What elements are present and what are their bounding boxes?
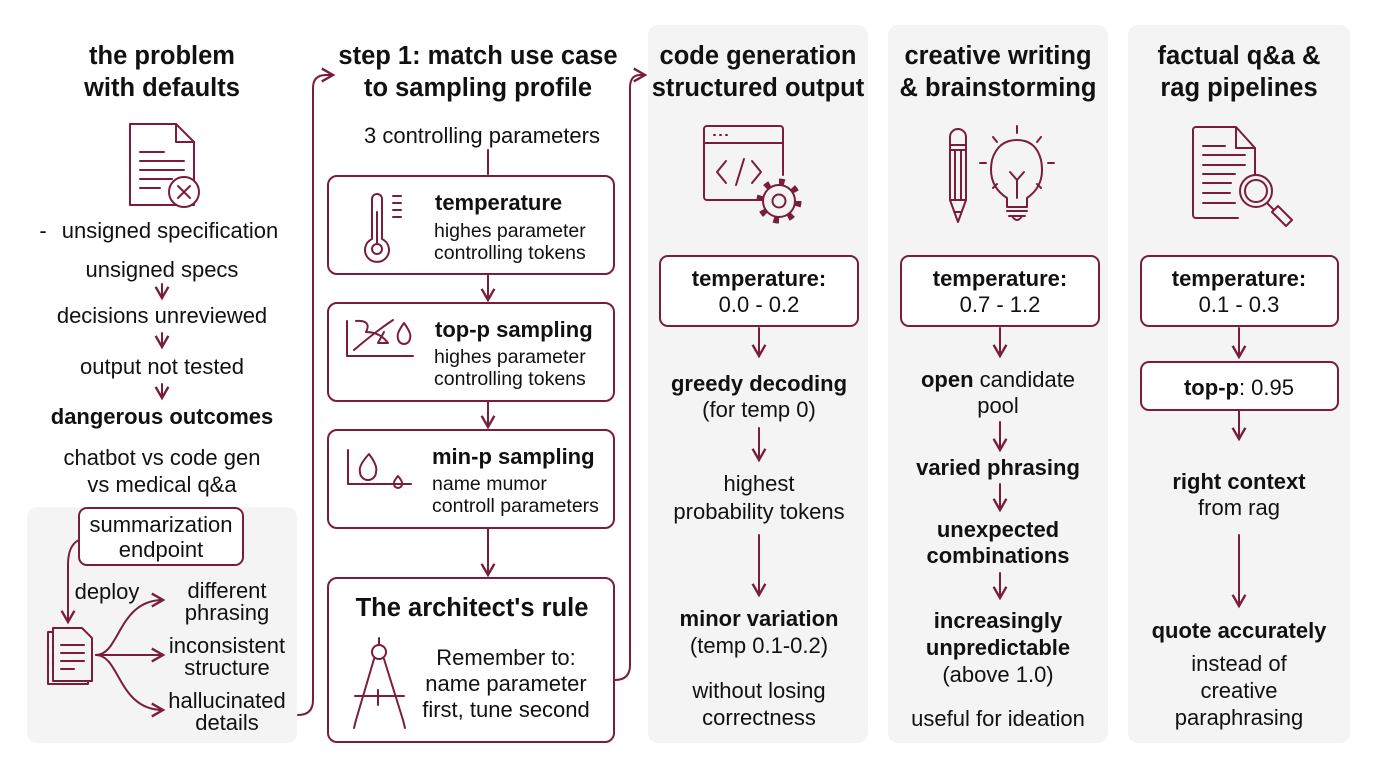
box: summarization endpoint: [79, 508, 243, 565]
icon: pencil and bulb: [950, 126, 1054, 222]
panel: code generation: highest: [724, 471, 794, 496]
box: temperature 0.0-0.2: 0.0 - 0.2: [719, 292, 799, 317]
flow: problem chain: [39, 218, 278, 497]
panel: creative writing: [888, 25, 1108, 743]
panel: factual q&a: instead of: [1191, 651, 1288, 676]
icon: code window with gear: [704, 126, 798, 220]
box: top-p sampling: [328, 303, 614, 401]
panel: code generation: correctness: [702, 705, 816, 730]
title: code generation: [660, 42, 856, 70]
panel: creative writing: pool: [977, 393, 1019, 418]
panel: factual q&a: factual q&a &: [1158, 42, 1320, 70]
flow: problem chain: decisions unreviewed: [57, 303, 267, 328]
box: the architect's rule: name parameter: [425, 671, 587, 696]
panel: creative writing: open candidate: [921, 367, 1075, 392]
title: step 1: [338, 42, 618, 102]
panel: creative writing: unpredictable: [926, 635, 1070, 660]
box: min-p sampling: name mumor: [432, 473, 547, 495]
box: top-p sampling: controlling tokens: [434, 368, 586, 390]
panel: creative writing: useful for ideation: [911, 706, 1085, 731]
branch labels: inconsistent: [169, 633, 285, 658]
box: top-p sampling: highes parameter: [434, 346, 586, 368]
panel: creative writing: & brainstorming: [900, 74, 1096, 102]
panel: factual q&a: creative: [1200, 678, 1278, 703]
flow: problem chain: unsigned specification: [62, 218, 278, 243]
panel: creative writing: (above 1.0): [942, 662, 1054, 687]
box: temperature: temperature: [435, 190, 562, 215]
title: [652, 42, 865, 102]
panel: code generation: (for temp 0): [702, 397, 816, 422]
box: temperature 0.7-1.2: [901, 256, 1099, 326]
title: step 1: step 1: match use case: [338, 42, 618, 70]
panel: creative writing: varied phrasing: [916, 455, 1080, 480]
box: temperature 0.1-0.3: [1141, 256, 1338, 326]
box: summarization endpoint: summarization: [89, 512, 233, 537]
branch labels: structure: [184, 655, 270, 680]
panel: factual q&a: [1128, 25, 1350, 743]
panel: code generation: minor variation: [680, 606, 838, 631]
flow: problem chain: -: [39, 218, 47, 243]
box: min-p sampling: controll parameters: [432, 495, 599, 517]
panel: creative writing: unexpected: [937, 517, 1059, 542]
branch labels: phrasing: [185, 600, 269, 625]
panel: code generation: greedy decoding: [671, 371, 847, 396]
arrow: connector to step 1: [298, 75, 333, 715]
box: temperature: [328, 176, 614, 274]
box: top-p 0.95: top-p: 0.95: [1184, 375, 1294, 400]
box: temperature 0.7-1.2: 0.7 - 1.2: [960, 292, 1040, 317]
box: temperature: highes parameter: [434, 220, 586, 242]
panel: code generation: (temp 0.1-0.2): [690, 633, 828, 658]
panel: code generation: [648, 25, 868, 743]
flow: problem chain: output not tested: [80, 354, 244, 379]
box: temperature 0.0-0.2: temperature:: [692, 266, 826, 291]
panel: factual q&a: quote accurately: [1152, 618, 1327, 643]
branch labels: different: [187, 578, 267, 603]
branch labels: [168, 578, 286, 735]
flow: problem chain: vs medical q&a: [87, 472, 237, 497]
icon: document with x: [130, 124, 199, 207]
panel: step 1: [328, 42, 618, 742]
title: the problem with defaults: the problem: [89, 42, 235, 70]
panel: summarization example: deploy: [75, 579, 139, 604]
panel: factual q&a: paraphrasing: [1175, 705, 1303, 730]
box: temperature 0.0-0.2: [660, 256, 858, 326]
panel: code generation: without losing: [691, 678, 826, 703]
panel: creative writing: creative writing: [904, 42, 1092, 70]
panel: step 1: 3 controlling parameters: [364, 123, 600, 148]
panel: factual q&a: rag pipelines: [1160, 74, 1318, 102]
box: min-p sampling: min-p sampling: [432, 444, 595, 469]
flow: problem chain: dangerous outcomes: [51, 404, 273, 429]
arrows: branches: [96, 600, 163, 710]
box: the architect's rule: Remember to:: [436, 645, 576, 670]
flow: problem chain: chatbot vs code gen: [64, 445, 260, 470]
panel: creative writing: increasingly: [934, 608, 1063, 633]
icon: documents: [48, 628, 92, 684]
box: min-p sampling: [328, 430, 614, 528]
arrow: connector to code generation: [615, 75, 645, 680]
panel: creative writing: combinations: [926, 543, 1070, 568]
panel: the problem with defaults: [27, 42, 297, 743]
box: the architect's rule: The architect's rule: [356, 594, 588, 622]
box: temperature 0.7-1.2: temperature:: [933, 266, 1067, 291]
title: step 1: to sampling profile: [364, 74, 592, 102]
box: the architect's rule: first, tune second: [422, 697, 590, 722]
box: temperature 0.1-0.3: temperature:: [1172, 266, 1306, 291]
icon: document with magnifier: [1193, 127, 1292, 226]
box: summarization endpoint: endpoint: [119, 537, 203, 562]
box: temperature 0.1-0.3: 0.1 - 0.3: [1199, 292, 1279, 317]
title: the problem with defaults: [83, 42, 240, 102]
title: structured output: [652, 74, 865, 102]
box: top-p sampling: top-p sampling: [435, 317, 593, 342]
box: top-p 0.95: [1141, 362, 1338, 410]
panel: code generation: probability tokens: [673, 499, 845, 524]
box: the architect's rule: [328, 578, 614, 742]
branch labels: hallucinated: [168, 688, 286, 713]
title: the problem with defaults: with defaults: [83, 74, 240, 102]
panel: summarization example: [27, 507, 297, 743]
panel: factual q&a: from rag: [1198, 495, 1280, 520]
panel: factual q&a: right context: [1172, 469, 1306, 494]
branch labels: details: [195, 710, 259, 735]
flow: problem chain: unsigned specs: [86, 257, 238, 282]
box: temperature: controlling tokens: [434, 242, 586, 264]
